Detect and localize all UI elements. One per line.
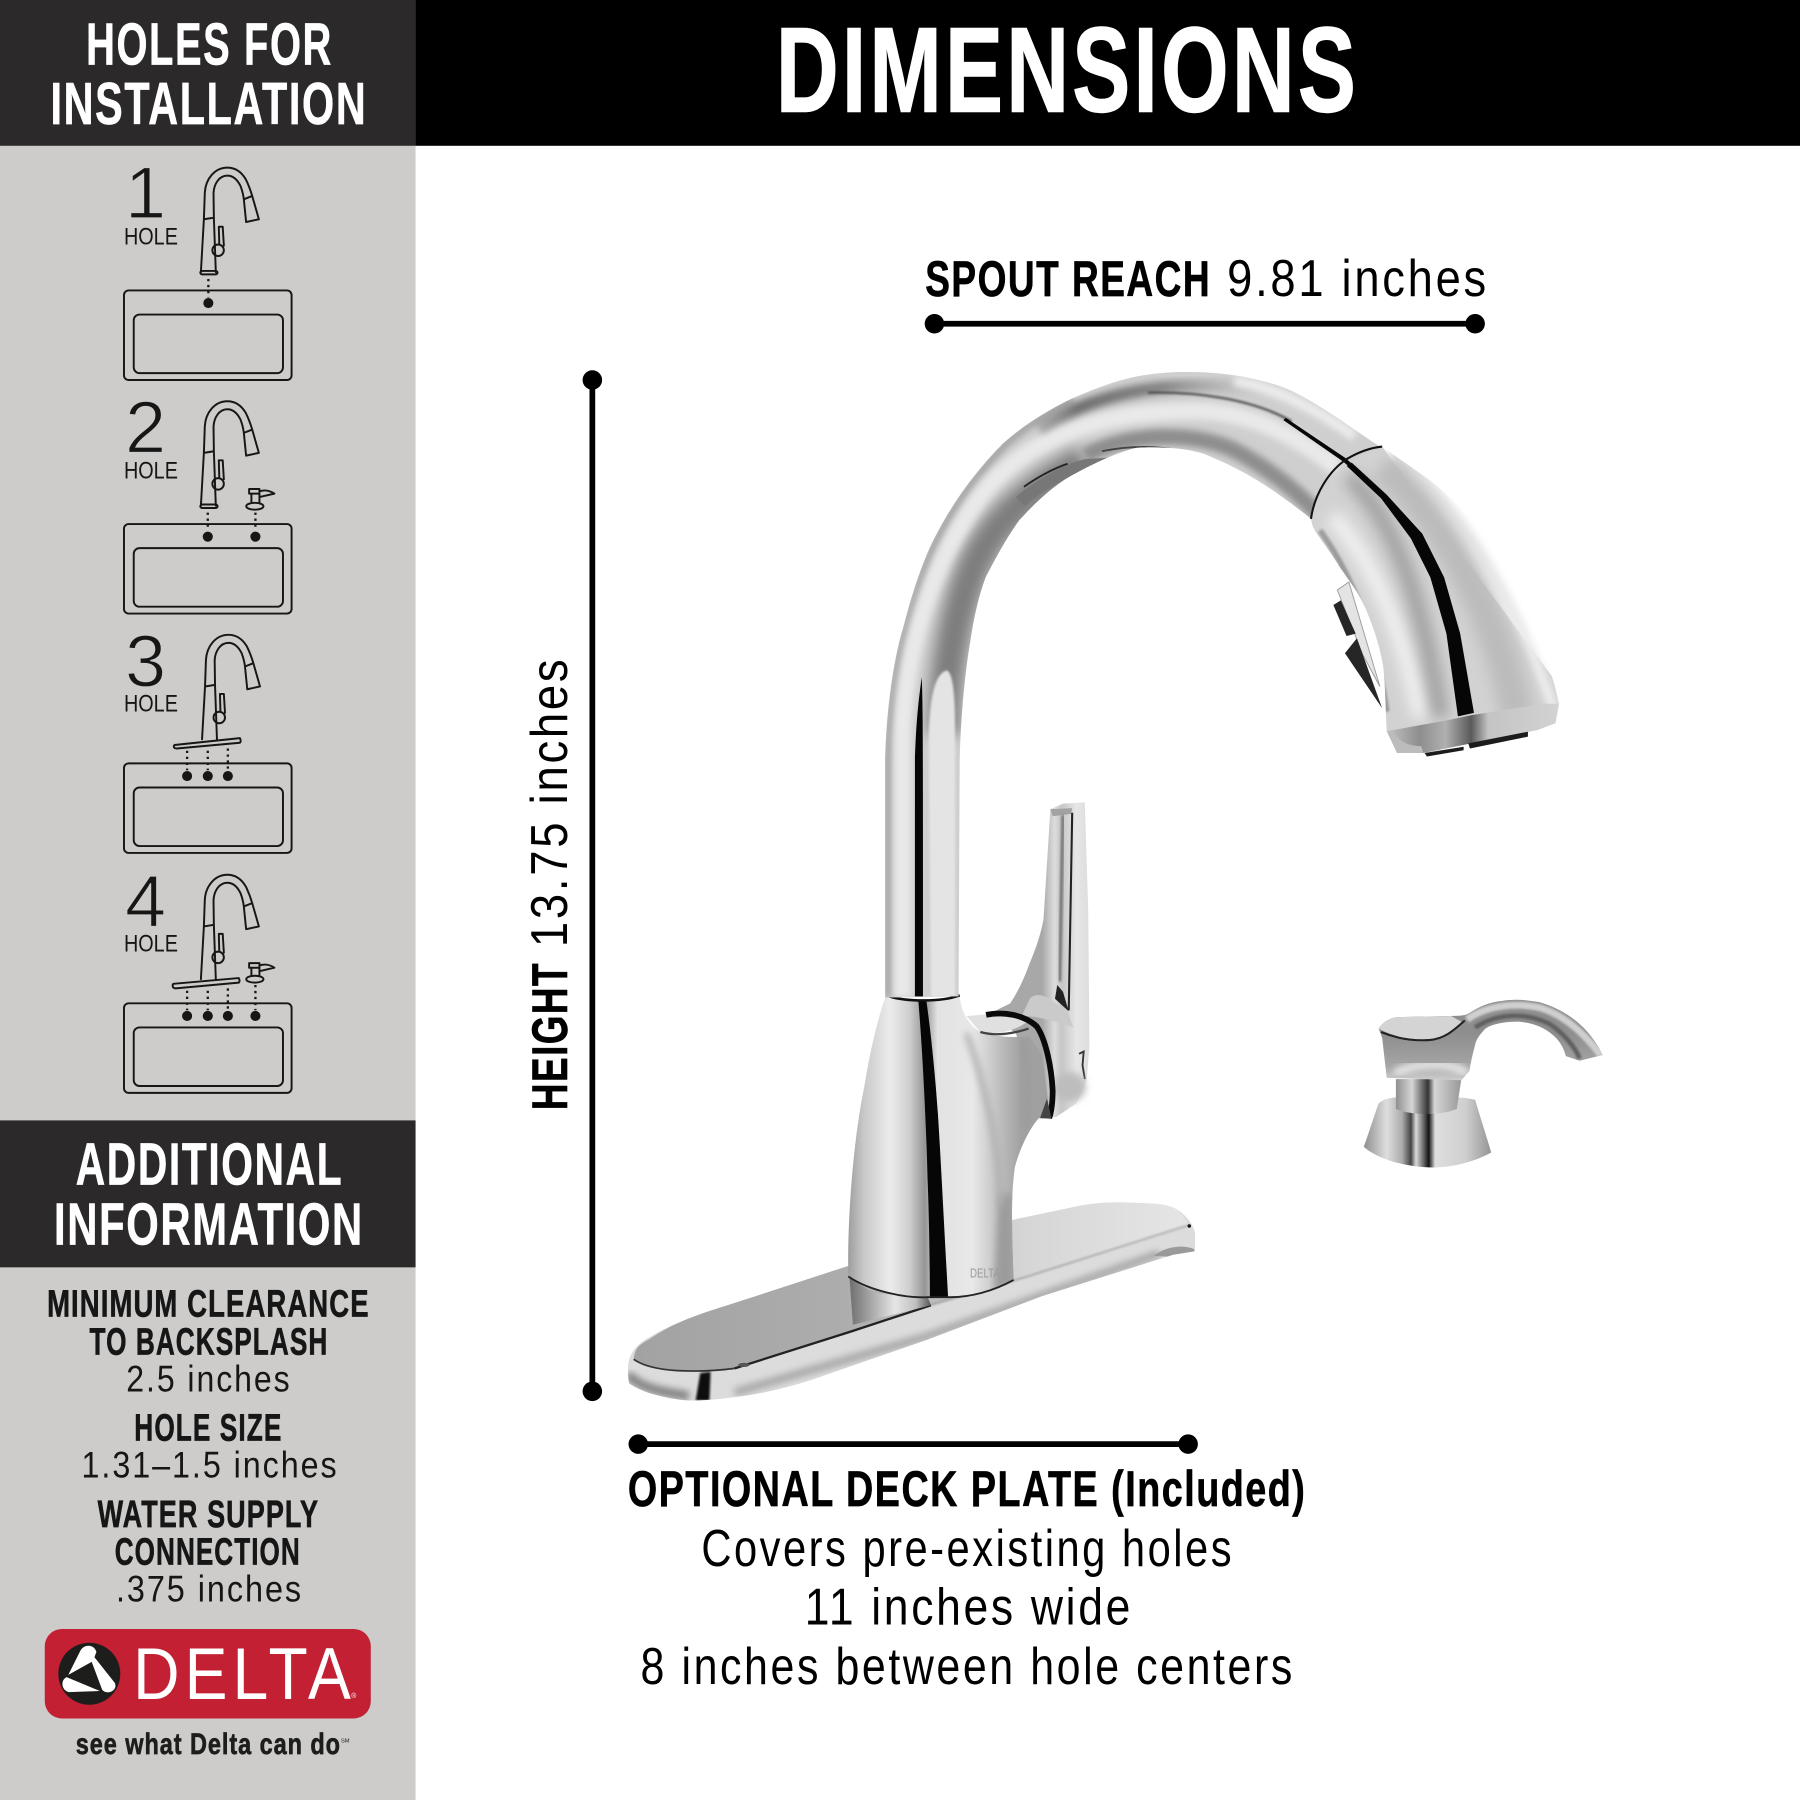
icon group: 4 hole sink xyxy=(124,859,292,1093)
dispenser base xyxy=(1364,1097,1491,1167)
icon group: 1 hole sink xyxy=(124,151,292,380)
text block: additional information details xyxy=(47,1284,370,1609)
panel: left sidebar background xyxy=(0,0,416,1800)
heading: additional information xyxy=(0,1120,416,1267)
text block: additional information details: HOLE SIZE xyxy=(134,1408,282,1450)
icon group: 4 hole sink: 4 xyxy=(125,859,166,942)
spout tube xyxy=(885,372,1561,998)
title bar: dimensions xyxy=(416,0,1800,146)
dimension: optional deck plate: OPTIONAL DECK PLATE (Included) xyxy=(628,1460,1306,1517)
dispenser head and spout xyxy=(1379,1000,1603,1080)
text block: additional information details: TO BACKSPLASH xyxy=(90,1322,328,1364)
faucet body xyxy=(848,995,1053,1299)
heading: holes for installation: INSTALLATION xyxy=(51,70,367,137)
title bar: dimensions: DIMENSIONS xyxy=(776,2,1359,137)
logo: delta: SM xyxy=(341,1739,350,1745)
product image: soap dispenser xyxy=(1364,1000,1603,1167)
text block: additional information details: .375 inches xyxy=(116,1568,303,1609)
dimension: height: HEIGHT xyxy=(521,962,578,1110)
icon group: 3 hole sink: 3 xyxy=(125,619,166,702)
icon group: 1 hole sink: 1 xyxy=(125,151,166,234)
icon group: 3 hole sink: HOLE xyxy=(124,691,178,718)
icon group: 2 hole sink: HOLE xyxy=(124,458,178,485)
text block: additional information details: 1.31–1.5 inches xyxy=(82,1444,339,1485)
logo: delta: ® xyxy=(351,1692,356,1700)
icon group: 4 hole sink: HOLE xyxy=(124,931,178,958)
heading: additional information: INFORMATION xyxy=(54,1190,364,1257)
logo: delta: DELTA xyxy=(133,1632,356,1715)
dimension: spout reach xyxy=(925,249,1489,333)
dimension: optional deck plate: Covers pre-existing holes xyxy=(701,1519,1234,1577)
heading: holes for installation xyxy=(0,0,416,146)
heading: holes for installation: HOLES FOR xyxy=(86,10,333,77)
logo: delta: see what Delta can do xyxy=(76,1728,341,1761)
dimension: height: 13.75 inches xyxy=(520,657,578,947)
lever handle xyxy=(987,802,1089,1118)
faucet body: DELTA xyxy=(970,1267,1000,1281)
product image: pull-down faucet xyxy=(628,372,1561,1401)
icon group: 2 hole sink: 2 xyxy=(125,385,166,468)
dimension: height xyxy=(520,370,602,1401)
logo: delta xyxy=(45,1629,371,1761)
dimension: optional deck plate: 8 inches between hole centers xyxy=(641,1637,1295,1695)
icon group: 1 hole sink: HOLE xyxy=(124,224,178,251)
dimension: spout reach: SPOUT REACH xyxy=(925,250,1211,307)
heading: additional information: ADDITIONAL xyxy=(76,1131,343,1198)
dimension: spout reach: 9.81 inches xyxy=(1227,249,1489,307)
icon group: 2 hole sink xyxy=(124,385,292,614)
dispenser neck xyxy=(1396,1079,1461,1114)
deck plate xyxy=(628,1202,1196,1401)
chrome stem under body xyxy=(849,1278,931,1325)
icon group: 3 hole sink xyxy=(124,619,292,853)
spray head xyxy=(1311,447,1561,758)
sprayer buttons xyxy=(1333,582,1382,708)
dimension: optional deck plate: 11 inches wide xyxy=(805,1577,1133,1635)
dimension: optional deck plate xyxy=(628,1434,1306,1695)
text block: additional information details: 2.5 inches xyxy=(126,1358,292,1399)
text block: additional information details: MINIMUM CLEARANCE xyxy=(47,1284,370,1326)
text block: additional information details: WATER SUPPLY xyxy=(98,1494,319,1536)
text block: additional information details: CONNECTION xyxy=(115,1532,301,1574)
